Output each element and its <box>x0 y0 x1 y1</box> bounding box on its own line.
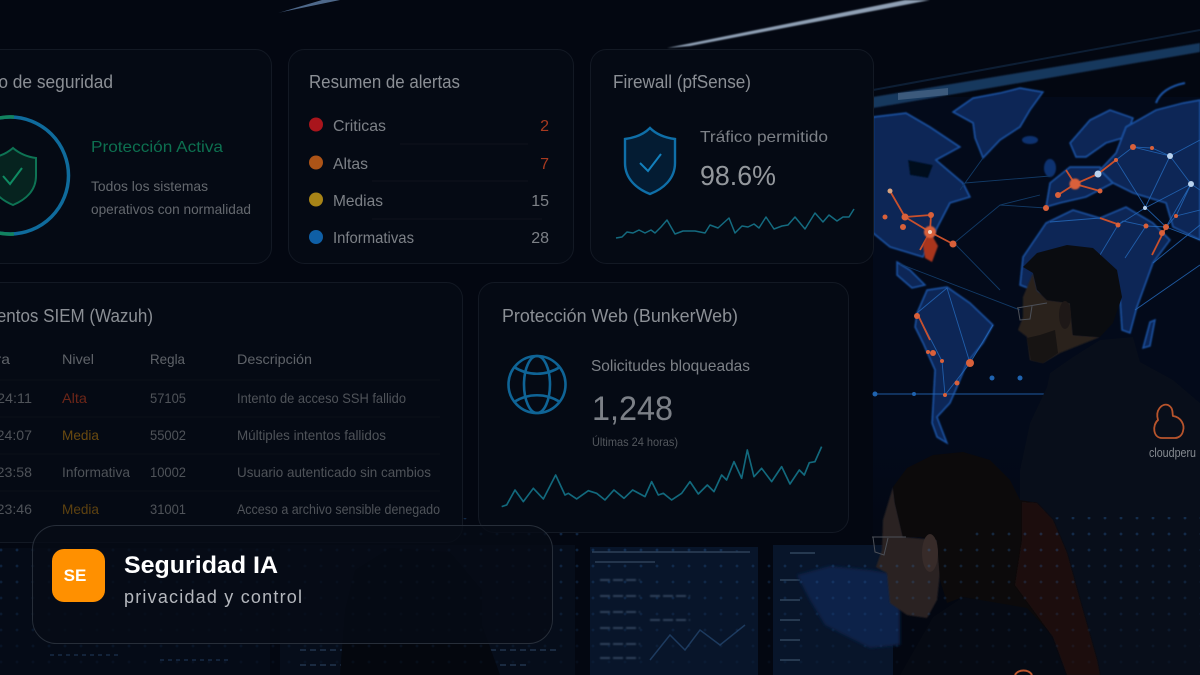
status heading: Protección Activa <box>91 139 223 156</box>
jacket <box>1020 337 1200 675</box>
table row 4: Media <box>62 501 99 517</box>
world map wall <box>872 42 1200 454</box>
Madagascar <box>1143 320 1155 348</box>
table row 3 <box>0 464 431 480</box>
table header: Nivel <box>62 351 94 367</box>
table row 2 <box>0 427 386 443</box>
silhouette in front of monitors <box>340 548 500 675</box>
woman foreground <box>872 452 1100 675</box>
alert row: medias <box>309 192 549 210</box>
table row 4: 31001 <box>150 501 186 517</box>
table row 3: 10002 <box>150 464 186 480</box>
status description <box>91 178 251 217</box>
metric label: Solicitudes bloqueadas <box>591 358 750 375</box>
panel: title card <box>32 526 552 644</box>
icon badge: SE <box>64 566 86 585</box>
metric value: 1,248 <box>592 390 673 428</box>
alert row: medias: 15 <box>531 193 549 210</box>
alert row: informativas <box>309 230 549 247</box>
heading: Firewall (pfSense) <box>613 72 751 92</box>
face <box>1018 273 1100 363</box>
panel: proteccion web <box>478 282 848 532</box>
table header: Regla <box>150 351 185 367</box>
sparkline <box>616 209 854 238</box>
panel: estado de seguridad <box>0 50 272 264</box>
table header: Descripción <box>237 351 312 367</box>
panel: resumen de alertas <box>288 50 574 264</box>
table row 2: Media <box>62 427 99 443</box>
Greenland <box>953 88 1043 158</box>
alert row: informativas: 28 <box>531 230 549 247</box>
icon: blue shield <box>625 128 675 194</box>
status description: operativos con normalidad <box>91 201 251 217</box>
card subtitle: privacidad y control <box>124 587 302 607</box>
dot grid overlay <box>0 517 1200 675</box>
status ring <box>0 117 68 234</box>
status description: Todos los sistemas <box>91 178 208 194</box>
bottom monitors <box>0 545 900 675</box>
Northern Europe <box>1070 110 1133 157</box>
alert row: criticas: 2 <box>540 118 549 135</box>
hair <box>1023 245 1122 337</box>
North America <box>873 113 970 257</box>
alert row: altas: 7 <box>540 156 549 173</box>
alert row: criticas: Criticas <box>333 118 386 135</box>
icon: cloud logo on jacket <box>1149 405 1196 460</box>
Southern Europe <box>1046 167 1113 207</box>
table row 1: Intento de acceso SSH fallido <box>237 390 406 406</box>
metric note: Últimas 24 horas) <box>592 434 678 449</box>
Arctic coast <box>1156 83 1185 103</box>
panel: firewall <box>590 50 874 264</box>
Africa <box>1020 207 1170 333</box>
heading: Resumen de alertas <box>309 72 460 92</box>
Asia <box>1100 100 1200 240</box>
table row 3: Usuario autenticado sin cambios <box>237 464 431 480</box>
Central America <box>897 262 925 288</box>
heading: Protección Web (BunkerWeb) <box>502 306 738 326</box>
alert row: medias: Medias <box>333 193 383 210</box>
man at wall <box>1017 245 1200 675</box>
sparkline <box>502 447 822 507</box>
table row 4: Acceso a archivo sensible denegado <box>237 501 440 517</box>
table row 4 <box>0 501 440 517</box>
hair <box>893 452 1100 675</box>
metric value: 98.6% <box>700 160 776 191</box>
icon: globe <box>508 356 566 413</box>
jacket <box>900 597 1070 675</box>
table row 2: 55002 <box>150 427 186 443</box>
card title: Seguridad IA <box>124 552 278 579</box>
alert row: informativas: Informativas <box>333 230 414 247</box>
table row 2: Múltiples intentos fallidos <box>237 427 386 443</box>
icon: green shield <box>0 148 36 205</box>
map network <box>872 140 1200 397</box>
South America <box>915 287 993 443</box>
table row 1: 57105 <box>150 390 186 406</box>
face <box>876 487 940 618</box>
ceiling lights <box>278 0 1200 90</box>
alert row: altas: Altas <box>333 156 368 173</box>
icon badge <box>52 549 105 602</box>
table row 3: Informativa <box>62 464 130 480</box>
table header <box>0 351 312 367</box>
table row 1 <box>0 390 406 406</box>
metric label: Tráfico permitido <box>700 129 828 146</box>
alert row: altas <box>309 156 549 173</box>
alert row: criticas <box>309 118 549 135</box>
table row 1: Alta <box>62 390 87 406</box>
panel: eventos SIEM <box>0 282 462 542</box>
ponytail <box>1015 502 1100 675</box>
